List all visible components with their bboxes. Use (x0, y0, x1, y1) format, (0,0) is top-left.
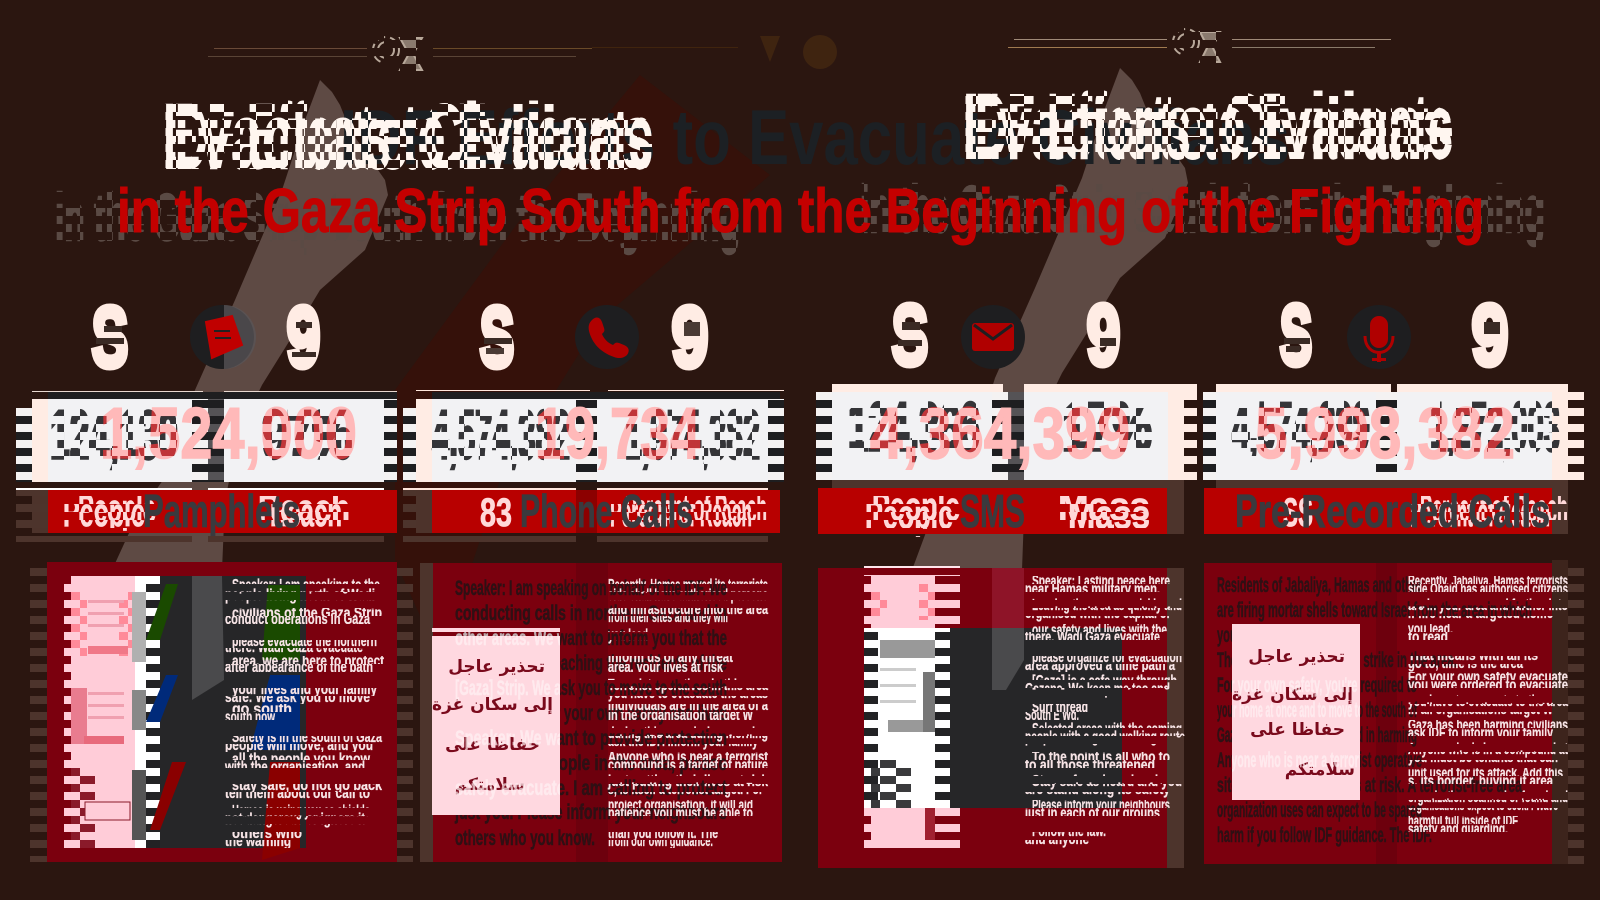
faint emblem top centre (760, 35, 837, 69)
white text: Terrorist operatives in this area (608, 677, 768, 694)
panel: SMS statistics: 17% (1062, 389, 1152, 465)
pamphlet: Arabic message box (1232, 624, 1360, 800)
icon: phone (575, 305, 639, 369)
white text (607, 577, 768, 850)
white text: To the point is all who to (1032, 749, 1170, 766)
panel: pre-recorded calls statistics (1203, 288, 1584, 537)
number: 5,998,382 (1255, 394, 1515, 474)
icon: pamphlet (190, 305, 256, 369)
white text: safe. We ask you to move (225, 689, 370, 706)
panel: SMS statistics: People (865, 493, 953, 537)
light transcript text over box (1232, 676, 1360, 772)
white text: area, we are here to protect (232, 653, 384, 670)
dark transcript text: Hamas are approaching the residents of the (455, 652, 727, 675)
dark transcript text: safely evacuate. I am calling to protect (455, 777, 727, 800)
glyphs (1280, 288, 1508, 382)
white text: others who (232, 825, 302, 842)
dark transcript text: Speaker: I am speaking on behalf of the IDF. We (455, 577, 727, 600)
text: IDF Efforts to Evacuate (163, 86, 653, 188)
panel: phone calls statistics (403, 290, 784, 542)
white text: Follow the law. (1032, 823, 1106, 840)
white text: near Hamas military men. (1025, 581, 1160, 598)
light transcript text over box: Speaker: We want to provide protection (455, 727, 727, 750)
panel: pamphlets statistics: 124,130 (50, 397, 178, 473)
panel: pamphlets statistics: Reach (258, 487, 350, 531)
title: dark underlying heading: IDF Efforts to Evacuate Civilians (340, 93, 1290, 181)
white text (224, 577, 384, 850)
glyphs (480, 290, 708, 384)
glyphs: 9 (1087, 288, 1120, 382)
white text: people with a good walking route (1025, 729, 1185, 746)
white text: than you follow it. The (608, 825, 718, 842)
white text: during this area during morning (608, 725, 768, 742)
pamphlet: Arabic message box: حفاظا على (445, 735, 540, 755)
stat box right (224, 399, 384, 482)
map: Gaza Strip silhouette left (112, 80, 388, 570)
glyphs (92, 290, 320, 384)
white text: people living north of Wadi (225, 587, 375, 604)
panel: pre-recorded calls statistics: 5,998,382 (1255, 394, 1515, 474)
pamphlet: Arabic message box: إلى سكان غزة (432, 695, 553, 715)
panel: phone calls statistics: 19,734 (535, 394, 700, 474)
white text: That means with all its (1408, 647, 1538, 664)
panel: phone calls detail (420, 563, 782, 862)
white text: Inform us of any threat (608, 649, 733, 666)
white text: harmful full inside of IDF (1408, 813, 1518, 830)
white text: please evacuate the northern (232, 633, 377, 650)
panel: SMS statistics: SMS (960, 485, 1025, 537)
panel: pamphlets statistics: 1,524,000 (100, 394, 357, 474)
panel: pre-recorded calls detail (1204, 560, 1584, 864)
white text: organised with the capital of (1025, 605, 1170, 622)
dark transcript text: conducting calls in northern Gaza and in (455, 602, 727, 625)
dark transcript text (1217, 574, 1532, 847)
white text: all the people you know (232, 751, 370, 768)
white text: project organisation, it will aid (608, 797, 753, 814)
white text: [Gaza] is a safe way through (1032, 673, 1177, 690)
white text: Safety is in the south of Gaza (232, 729, 382, 746)
white text (1408, 573, 1568, 838)
white text: South E Wd. (1025, 707, 1079, 724)
panel: SMS statistics: 124,366 (848, 389, 980, 465)
white text: Speaker: I am speaking to the (232, 577, 380, 594)
dark transcript text: Speaker: We want to provide protection (455, 727, 727, 750)
white text: to all those threatened (1025, 757, 1155, 774)
panel: SMS detail (818, 566, 1185, 868)
glyphs (892, 288, 1120, 382)
SMS screenshots (864, 566, 1122, 848)
white text: tell them about our call to (225, 785, 370, 802)
white text: side shall have authorised persons (608, 587, 768, 604)
white text: safety and guarding. (1408, 821, 1508, 838)
panel: pamphlets statistics: People (78, 487, 156, 531)
white text: our safety and lives with the (1032, 622, 1167, 639)
light transcript text over box: safely evacuate. I am calling to protect (455, 777, 727, 800)
stat box right (1397, 392, 1552, 480)
panel: phone calls statistics: Percent of Reach (610, 491, 752, 535)
white text: Speaker: Lasting peace here (1032, 573, 1170, 590)
white text: south now (225, 709, 275, 726)
panel: pre-recorded calls statistics: 4,574,299 (1232, 389, 1370, 465)
title mosaic right (966, 90, 1452, 160)
subtitle: ghost mosaic left: in the Gaza Strip South from the Beginning (55, 180, 740, 254)
emblem left (373, 37, 422, 70)
number: 4,364,399 (870, 394, 1130, 474)
light transcript text over box: For your own safety, you're required to (1217, 674, 1417, 697)
pamphlet: Arabic message box: تحذير عاجل (448, 657, 545, 677)
white text: just in each of our groups (1024, 805, 1160, 822)
pamphlet images (64, 576, 146, 848)
panel: pamphlets detail (30, 562, 413, 862)
white text: just putting their lives at risk (607, 773, 768, 790)
glyphs: 9 (672, 290, 708, 384)
divider with emblem, right (1008, 29, 1391, 62)
white text: Hamas is using you as shields (232, 803, 370, 820)
panel: SMS statistics: People (872, 485, 960, 529)
white text: and anyone (1025, 831, 1089, 848)
label banner (403, 490, 432, 533)
glyphs: S (1280, 288, 1312, 382)
stat box left (1216, 384, 1391, 392)
white text: Stay safe as heard and you (1032, 773, 1182, 790)
title mosaic left (166, 100, 652, 170)
white text: s, is itself a terrorist target. For (608, 781, 763, 798)
glyphs: S (480, 290, 514, 384)
dark transcript text: other areas. We want to inform you that the (455, 627, 727, 650)
dark transcript text: to all of the people in the area, please (455, 752, 727, 775)
white text: area, your lives at risk (608, 659, 723, 676)
dark transcript text: For your own safety, you're required to (1217, 674, 1417, 697)
white text: Anyone who is near a terrorist (608, 749, 768, 766)
white text: area approved a time path a (1025, 657, 1175, 674)
white text: Leaving the area as quickly and (1032, 597, 1182, 614)
white text: you have to evacuate the areas (608, 685, 768, 702)
label banner (832, 480, 1184, 488)
white text: Surf thread (1032, 699, 1088, 716)
white text: go to, time is the area (1408, 655, 1523, 672)
panel: pamphlets statistics: Pamphlets (143, 485, 300, 537)
panel: SMS statistics: Mass (1068, 493, 1150, 537)
white text: there. Wadi Gaza evacuate (1025, 629, 1160, 646)
icon: microphone (1347, 305, 1411, 369)
panel: pamphlets statistics: Reach (270, 491, 342, 535)
white text: not dangerous or ignore it (225, 811, 365, 828)
white text (1024, 573, 1185, 848)
stat box left (832, 384, 1003, 392)
stat box right (1024, 384, 1197, 392)
white text: in the organisation target W (608, 707, 754, 724)
pamphlet: Arabic message box: حفاظا على (1250, 720, 1345, 740)
stat box left (416, 399, 432, 482)
dark panel with flag shapes (146, 576, 306, 860)
white text: are stand along its safety (1025, 781, 1170, 798)
glyphs: S (892, 288, 928, 382)
icon: envelope (961, 305, 1025, 369)
dark transcript text: others who you know. (455, 827, 595, 850)
glyphs: 9 (1472, 288, 1508, 382)
panel: phone calls statistics: 83 (480, 491, 512, 535)
white text: from their sites and they will (608, 609, 728, 626)
pamphlet: Arabic message box: سلامتكم (455, 775, 525, 795)
white text: patience you must be able to (608, 805, 753, 822)
white text: you lead (608, 627, 648, 644)
white text: after appearance of the path (225, 659, 373, 676)
label banner (1216, 480, 1568, 488)
decoration: red diagonal arrow shape (395, 75, 770, 660)
panel: pamphlets statistics: People (63, 491, 145, 535)
panel: pre-recorded calls statistics: SS (1283, 491, 1313, 535)
title mosaic left: Evacuate Civilians (163, 86, 653, 188)
dark transcript text: you're located. (1217, 624, 1295, 647)
white text: and infrastructure into the area (608, 601, 768, 618)
emblem right (1173, 29, 1220, 62)
map: Gaza Strip silhouette right (912, 68, 1188, 570)
white text: people will move, and you (225, 737, 373, 754)
pamphlet: Arabic message box: إلى سكان غزة (1232, 685, 1353, 705)
label banner (32, 490, 48, 533)
white text: Gazans. We keep me too and (1025, 681, 1170, 698)
white text: please organize for evacuation (1032, 649, 1182, 666)
white text: your lives and your family (232, 681, 377, 698)
glyphs: S (92, 290, 128, 384)
white text: conduct operations in Gaza (225, 611, 370, 628)
stat box left (32, 399, 48, 482)
panel: SMS statistics: Mass (1058, 485, 1150, 529)
white text: Selected areas with the coming (1032, 721, 1182, 738)
dark transcript text: [Gaza] Strip. We ask you to move to the south (455, 677, 727, 700)
white text: go south (232, 701, 292, 718)
number: 19,734 (535, 394, 700, 474)
stat box right (597, 399, 768, 482)
number: 1,524,000 (100, 394, 357, 474)
glyphs: 9 (287, 290, 320, 384)
panel: phone calls statistics: Phone Calls (520, 485, 693, 537)
white text: the warning (225, 833, 291, 850)
white text: Recently, Hamas moved its terrorists (608, 577, 768, 594)
white text: compound is a target of nature (608, 757, 768, 774)
panel: pamphlets statistics: 97% (262, 397, 352, 473)
white text: stay safe, do not go back (232, 777, 382, 794)
pamphlet: Arabic message box (432, 628, 560, 815)
panel: phone calls statistics: 1,974,382 (625, 397, 760, 473)
light transcript text over box: [Gaza] Strip. We ask you to move to the south (455, 677, 727, 700)
light transcript text over box: other areas. We want to inform you that the (455, 627, 727, 650)
white text: Please inform your neighbours (1032, 797, 1170, 814)
panel: SMS statistics (816, 288, 1197, 537)
dark transcript text: just you. Please inform your neighbours (454, 801, 727, 824)
light transcript text over box (456, 632, 560, 800)
dark transcript text: of Wadi Gaza for your own safety and lives (455, 702, 727, 725)
panel: phone calls statistics: 4,574,382 (432, 397, 570, 473)
white text: from our own guidance. (608, 833, 713, 850)
white text: you lead. (1408, 621, 1453, 638)
dark transcript text (454, 577, 727, 850)
panel: SMS statistics: 4,364,399 (870, 394, 1130, 474)
panel: pamphlets statistics (16, 290, 397, 542)
white text: civilians of the Gaza Strip (232, 605, 382, 622)
white text: there. Wadi Gaza evacuate (225, 639, 363, 656)
white text: ask the IDF. Inform your family (608, 733, 758, 750)
text: Percent of Reach (625, 487, 767, 531)
white text: with the organisation, and (224, 759, 365, 776)
pamphlet: Arabic message box: تحذير عاجل (1248, 647, 1345, 667)
white text: to read (1408, 629, 1448, 646)
white text: individuals are in the area of a (608, 697, 768, 714)
pamphlet: Arabic message box: سلامتكم (1285, 760, 1355, 780)
divider with emblem, left (208, 37, 738, 70)
